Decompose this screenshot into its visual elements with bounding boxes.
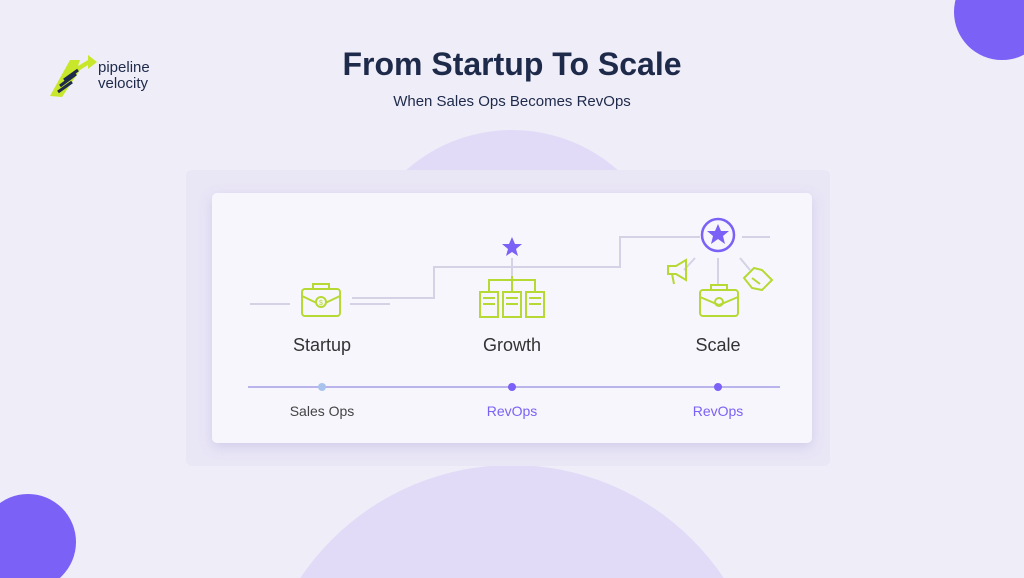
icon: startup briefcase (302, 284, 340, 316)
subtitle: When Sales Ops Becomes RevOps (393, 93, 631, 110)
icon: startup briefcase: $ (319, 300, 323, 307)
icon: scale star circle with icons (668, 219, 772, 316)
logo (50, 55, 150, 97)
step connector lines (250, 237, 770, 304)
timeline labels: RevOps (487, 403, 537, 419)
timeline labels: RevOps (693, 403, 743, 419)
card (212, 193, 812, 443)
icon: growth star + org chart (480, 237, 544, 317)
decorative circle bottom (257, 465, 767, 578)
title: From Startup To Scale (342, 46, 682, 82)
stage labels: Growth (483, 335, 541, 355)
stage labels: Startup (293, 335, 351, 355)
stage labels (293, 335, 741, 355)
timeline labels: Sales Ops (290, 403, 354, 419)
corner shape bottom-left (0, 494, 76, 578)
logo: velocity (98, 75, 149, 92)
timeline (248, 383, 780, 391)
back panel (186, 170, 830, 466)
corner shape top-right (954, 0, 1024, 60)
decorative circle top (352, 130, 672, 450)
logo: pipeline (98, 59, 150, 76)
stage labels: Scale (695, 335, 741, 355)
timeline labels (290, 403, 743, 419)
